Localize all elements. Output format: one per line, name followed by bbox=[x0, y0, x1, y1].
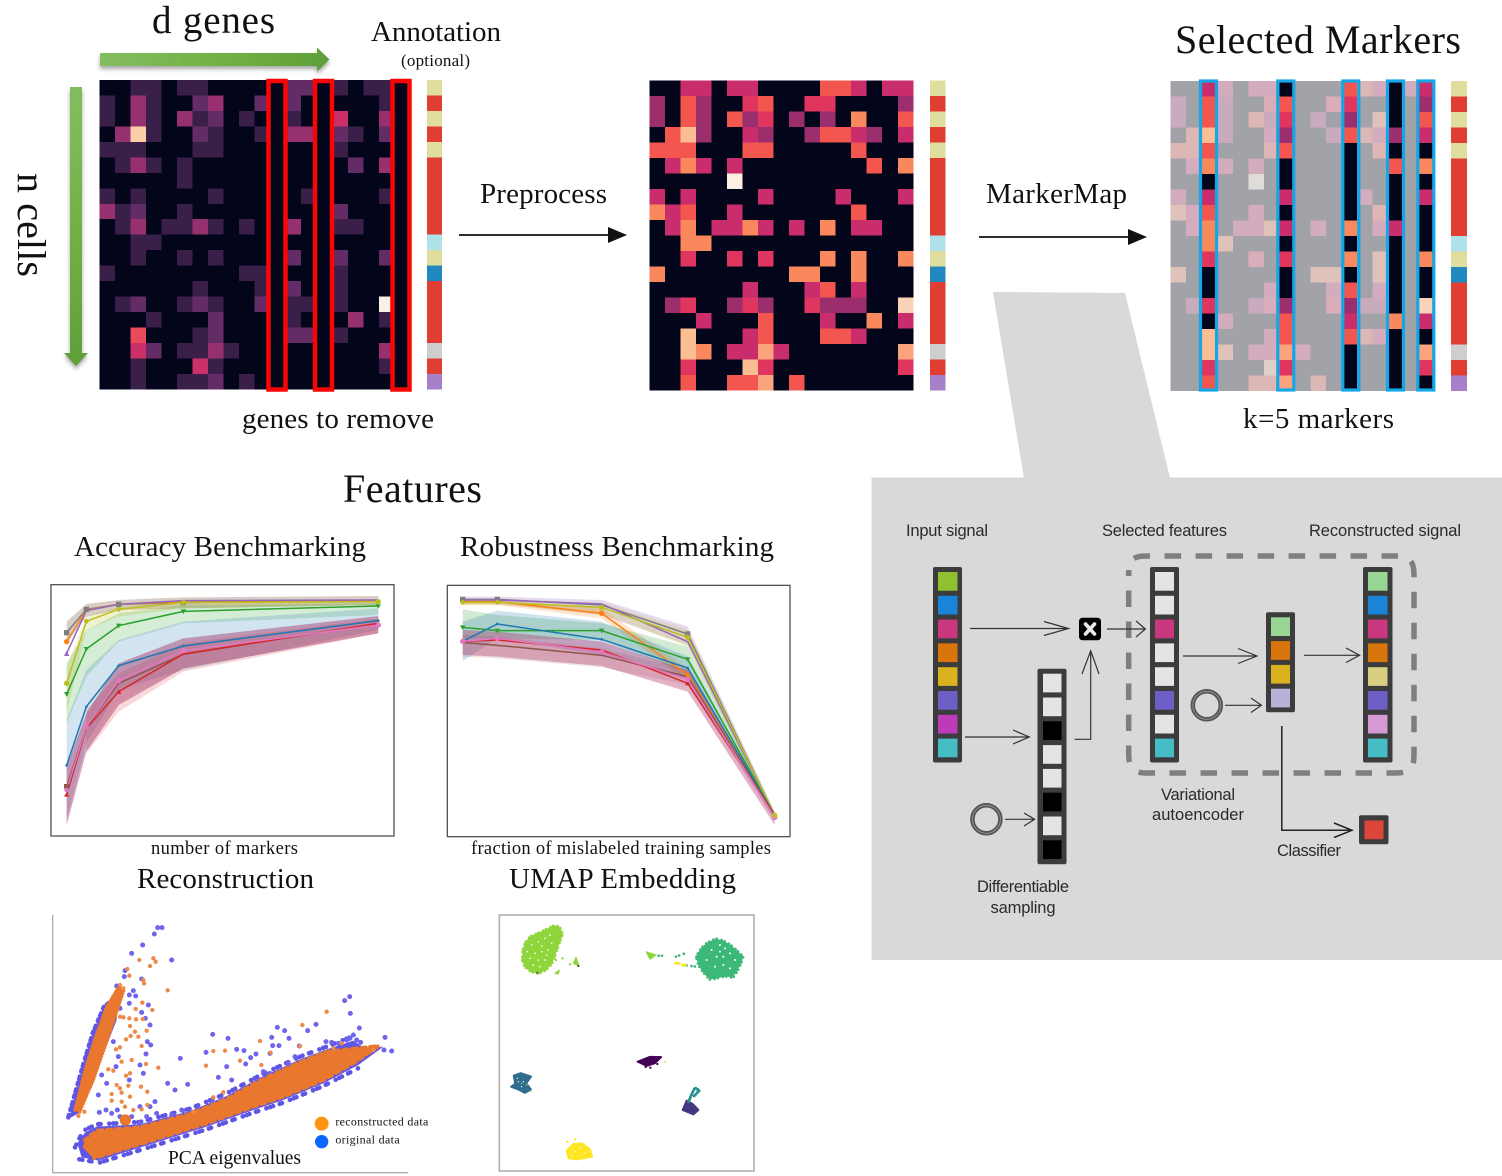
annotation bar: raw bbox=[427, 80, 442, 390]
chart: robustness vs mislabeled fraction bbox=[447, 585, 790, 837]
legend bbox=[315, 1115, 429, 1148]
arrow: selected to latent bbox=[1183, 648, 1257, 664]
output: classifier square bbox=[1359, 815, 1388, 844]
cluster: light green bbox=[522, 925, 656, 974]
red boxes: genes to remove bbox=[268, 81, 410, 390]
arrow: input to multiply bbox=[970, 622, 1069, 636]
label: input signal: Input signal bbox=[906, 522, 988, 540]
heading: UMAP embedding: UMAP Embedding bbox=[509, 863, 736, 895]
heading: robustness benchmarking: Robustness Benchmarking bbox=[460, 531, 774, 563]
heading: reconstruction: Reconstruction bbox=[137, 863, 314, 895]
cluster: purple bbox=[637, 1057, 665, 1068]
cluster: yellow bbox=[567, 1139, 592, 1159]
heading: features: Features bbox=[343, 466, 482, 511]
chart: UMAP embedding clusters bbox=[499, 915, 754, 1171]
heading: n cells: n cells bbox=[9, 173, 54, 277]
bar: reconstructed signal bbox=[1363, 567, 1392, 762]
dashed box: variational autoencoder bbox=[1129, 556, 1414, 773]
label: differentiable sampling: sampling bbox=[990, 899, 1056, 917]
raw heatmap with genes to remove bbox=[99, 80, 410, 390]
arrow: noise to latent bbox=[1225, 698, 1261, 712]
chart: PCA reconstruction scatter bbox=[53, 915, 429, 1173]
heading: d genes: d genes bbox=[152, 0, 275, 42]
arrow: latent to classifier bbox=[1282, 726, 1352, 838]
label: classifier: Classifier bbox=[1277, 842, 1342, 860]
chart: accuracy vs number of markers bbox=[51, 585, 394, 836]
label: genes to remove: genes to remove bbox=[242, 403, 434, 435]
axis label: number of markers: number of markers bbox=[151, 839, 298, 859]
heatmap: raw counts bbox=[99, 80, 410, 389]
blue boxes: k=5 selected markers bbox=[1200, 81, 1434, 390]
bar: latent space bbox=[1266, 612, 1295, 712]
legend: original data bbox=[335, 1132, 400, 1146]
heatmap: preprocessed bbox=[649, 81, 913, 391]
icon: multiply operator bbox=[1079, 618, 1101, 640]
arrow: markermap bbox=[979, 229, 1147, 245]
callout connector: gray wedge from heatmap to model panel bbox=[993, 292, 1170, 478]
arrow: noise to sampling bbox=[1005, 813, 1035, 826]
axis label: fraction of mislabeled training samples: fraction of mislabeled training samples bbox=[471, 839, 771, 859]
icon: noise source for sampling bbox=[972, 805, 1000, 833]
label: markermap: MarkerMap bbox=[986, 178, 1127, 210]
points: reconstructed data bbox=[73, 958, 378, 1158]
bar: selected features bbox=[1150, 567, 1179, 762]
label: differentiable sampling: Differentiable bbox=[977, 878, 1069, 896]
label: variational autoencoder bbox=[1152, 786, 1244, 824]
label: optional: (optional) bbox=[401, 51, 470, 70]
label: preprocess: Preprocess bbox=[480, 178, 607, 210]
points: original data bbox=[68, 928, 392, 1163]
annotation bar: preprocessed bbox=[930, 81, 946, 391]
heading: selected markers: Selected Markers bbox=[1175, 17, 1461, 62]
heading: annotation: Annotation bbox=[371, 16, 502, 48]
arrow: multiply to selected features bbox=[1107, 621, 1145, 637]
label: differentiable sampling bbox=[977, 878, 1069, 917]
legend: reconstructed data bbox=[335, 1115, 429, 1129]
panel: MarkerMap model diagram bbox=[872, 478, 1502, 960]
cluster: green bbox=[659, 939, 743, 980]
arrow: preprocess bbox=[459, 227, 627, 243]
heading: accuracy benchmarking: Accuracy Benchmarking bbox=[74, 531, 366, 563]
label: PCA eigenvalues: PCA eigenvalues bbox=[168, 1148, 301, 1169]
annotation bar: selected bbox=[1451, 81, 1467, 391]
selected markers heatmap bbox=[1171, 81, 1435, 391]
label: k=5 markers: k=5 markers bbox=[1243, 403, 1394, 435]
label: variational autoencoder: autoencoder bbox=[1152, 806, 1244, 824]
arrow: sampling to multiply bbox=[1075, 651, 1099, 739]
arrow: latent to reconstruction bbox=[1304, 648, 1360, 662]
cluster: blue bbox=[511, 1073, 531, 1093]
icon: noise source for autoencoder bbox=[1193, 691, 1221, 719]
label: reconstructed signal: Reconstructed signal bbox=[1309, 522, 1461, 540]
heatmap: selected columns highlighted bbox=[1171, 81, 1435, 391]
label: variational autoencoder: Variational bbox=[1161, 786, 1235, 804]
arrow: genes axis bbox=[100, 48, 330, 72]
bar: input signal bbox=[933, 567, 962, 762]
label: selected features: Selected features bbox=[1102, 522, 1227, 540]
cluster: indigo and teal bbox=[683, 1088, 699, 1114]
arrow: input to sampling bbox=[965, 730, 1029, 744]
bar: differentiable sampling mask bbox=[1038, 669, 1066, 864]
arrow: cells axis bbox=[64, 87, 88, 366]
